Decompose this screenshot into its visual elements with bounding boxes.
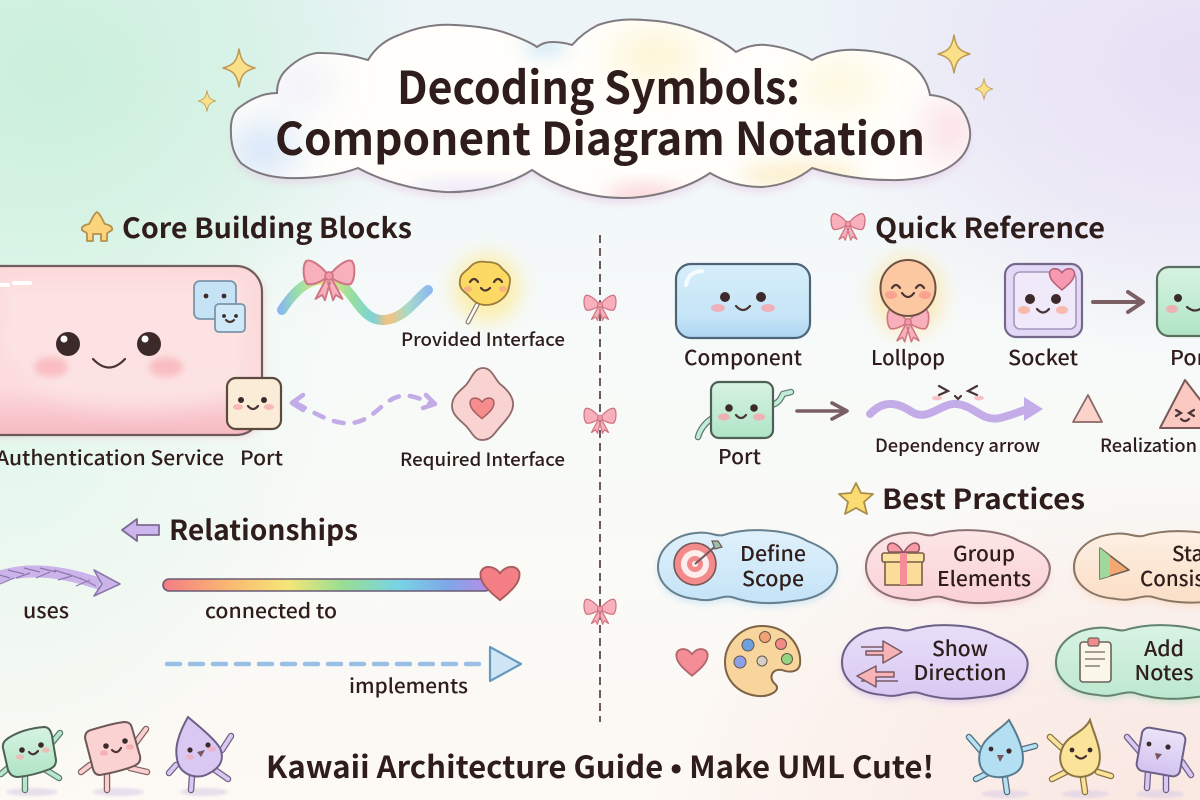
heading: quick reference: Quick Reference [875,207,1105,247]
face above wave [932,386,984,400]
pill: show direction: Direction [914,656,1006,686]
pill: add notes: Add [1144,632,1184,662]
dashed purple arrow [292,395,435,423]
icon: lollipop [872,255,944,342]
pill: group elements: Group [953,537,1015,567]
pill: add notes [1056,625,1200,703]
icon: direction arrows [857,641,902,687]
pill: add notes: Notes [1134,656,1194,686]
centre divider [599,235,601,722]
title text: Decoding Symbols: [397,52,800,117]
label: implements: implements [349,670,468,699]
icon: small triangle [1073,395,1102,422]
label: lollipop: Lollpop [871,341,945,371]
icon: component [676,264,810,338]
icon: clipboard [1080,638,1111,682]
pill: define scope: Scope [742,562,804,592]
icon: waving port [698,382,791,438]
icon: target [674,541,722,585]
pill: group elements: Elements [937,562,1031,592]
sparkles [198,35,993,111]
icon: triangle [1100,548,1129,579]
title text [275,52,925,168]
pill: stay consistent [1074,531,1200,607]
heading: relationships: Relationships [169,508,358,548]
character: purple cube [1127,727,1191,798]
divider bows [584,295,616,624]
character: green cube [1,727,60,796]
label: port: Port [240,442,283,471]
icon: port top right [1157,267,1200,336]
port [227,378,281,429]
icon: required interface [452,368,513,440]
character: pink cube [81,722,147,796]
heart [676,649,708,676]
character: yellow drop [1050,720,1111,798]
heading: core building blocks: Core Building Blocks [122,207,412,247]
pill: show direction [842,625,1028,703]
label: provided interface: Provided Interface [401,326,565,352]
dashed realization arrow [167,647,521,681]
label: socket: Socket [1008,341,1078,371]
pill: define scope: Define [740,537,806,567]
face [34,332,183,377]
component: authentication service [0,266,281,438]
arrow: socket to port [1093,292,1143,312]
icon: large triangle [1160,380,1200,428]
icon: provided interface lollipop [453,254,521,322]
label: component: Component [684,341,802,371]
label: required interface: Required Interface [400,446,565,472]
pill: define scope [658,530,837,607]
rainbow squiggle with bow [282,261,428,320]
character: blue drop [969,720,1035,798]
pill: show direction: Show [932,632,988,662]
label: authentication service: Authentication Service [0,442,224,471]
pill: group elements [866,530,1050,607]
heading: best practices: Best Practices [882,477,1085,517]
footer tagline: Kawaii Architecture Guide • Make UML Cute! [266,743,934,787]
label: connected to: connected to [205,595,337,624]
icon: socket [1005,264,1082,337]
icon: palette [725,626,800,696]
label: dependency arrow: Dependency arrow [875,432,1040,458]
rainbow line with heart [163,567,520,600]
label: realization: Realization [1100,432,1197,458]
icon: gift [882,543,924,585]
title cloud [228,20,970,205]
character: purple drop [169,717,231,796]
title text: Component Diagram Notation [275,103,925,168]
arrow: uses [0,568,120,596]
arrow: dependency wave [870,397,1043,421]
arrow: port to dependency [797,403,847,419]
mini component cubes [194,281,245,332]
label: port: Port [718,440,761,470]
label: uses: uses [23,594,69,624]
